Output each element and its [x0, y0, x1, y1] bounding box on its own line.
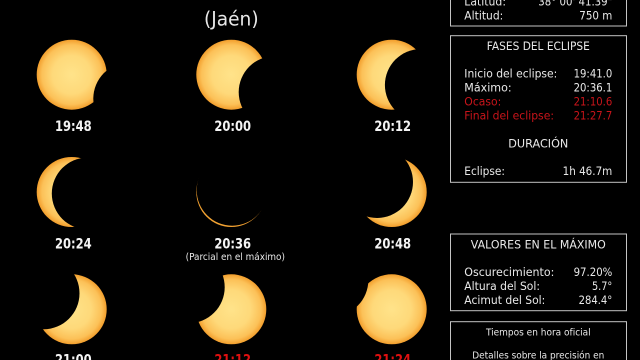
eclipse phase 20:36 maximum: (Parcial en el máximo) [186, 252, 285, 263]
panel: values at maximum: 284.4° [579, 293, 612, 307]
eclipse phase 21:24 [356, 274, 427, 360]
eclipse phase 20:24: 20:24 [55, 237, 92, 253]
title: (Jaén) [204, 8, 259, 30]
eclipse phase 19:48 [36, 40, 106, 131]
panel: eclipse phases: 21:27.7 [574, 108, 612, 122]
eclipse phase 19:48: 19:48 [55, 119, 92, 135]
panel: location: Altitud: [464, 8, 503, 22]
panel: eclipse phases: Máximo: [464, 81, 512, 95]
panel: eclipse phases: 20:36.1 [574, 81, 612, 95]
eclipse phase 20:00 [196, 40, 262, 131]
panel: eclipse phases: Ocaso: [464, 94, 501, 108]
eclipse phase 20:36 maximum: 20:36 [214, 237, 251, 253]
panel: eclipse phases: Inicio del eclipse: [464, 67, 557, 81]
eclipse phase 20:48 [366, 160, 427, 248]
panel: eclipse phases: Final del eclipse: [464, 108, 554, 122]
eclipse phase 20:36 maximum [186, 178, 284, 262]
panel: location: 750 m [579, 8, 612, 22]
panel: notes [450, 322, 626, 360]
eclipse phase 20:24 [36, 157, 92, 248]
eclipse phase 20:12: 20:12 [374, 119, 411, 135]
panel: values at maximum: VALORES EN EL MÁXIMO [471, 236, 606, 251]
panel: eclipse phases: DURACIÓN [508, 135, 568, 150]
panel: eclipse phases: 19:41.0 [574, 67, 612, 81]
panel: values at maximum: 5.7° [592, 279, 612, 293]
panel: eclipse phases: 1h 46.7m [563, 164, 612, 178]
panel: location [450, 0, 626, 26]
panel: values at maximum: Oscurecimiento: [464, 265, 554, 279]
panel: values at maximum: Acimut del Sol: [464, 293, 545, 307]
panel: values at maximum: Altura del Sol: [464, 279, 540, 293]
panel: notes: Tiempos en hora oficial [485, 328, 591, 339]
eclipse phase 21:00 [42, 274, 107, 360]
panel: eclipse phases [450, 36, 626, 182]
panel: eclipse phases: FASES DEL ECLIPSE [487, 39, 590, 53]
panel: values at maximum: 97.20% [574, 265, 612, 279]
eclipse phase 20:48: 20:48 [374, 237, 411, 253]
panel: eclipse phases: 21:10.6 [574, 94, 612, 108]
eclipse phase 21:12 [198, 274, 266, 360]
eclipse phase 20:00: 20:00 [214, 119, 251, 135]
panel: values at maximum [450, 234, 626, 311]
eclipse phase 20:12 [356, 40, 416, 131]
panel: eclipse phases: Eclipse: [464, 164, 505, 178]
